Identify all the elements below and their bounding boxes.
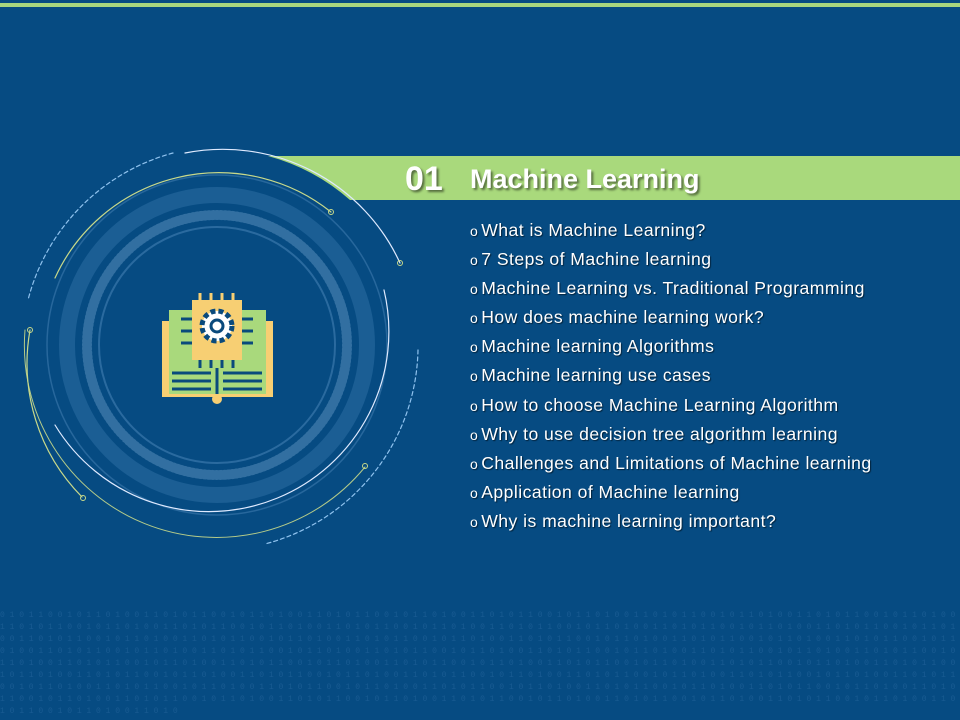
list of topics: oApplication of Machine learning [470,482,740,502]
list of topics: oMachine learning Algorithms [470,336,714,356]
circular tech graphic [24,148,419,544]
list of topics: oWhy is machine learning important? [470,511,776,531]
section number: 01 [405,160,443,198]
list of topics: oWhy to use decision tree algorithm learning [470,424,838,444]
section title: Machine Learning [470,164,700,194]
list of topics: oMachine learning use cases [470,365,711,385]
top green line [0,3,960,7]
list of topics: oHow does machine learning work? [470,307,764,327]
list of topics: oWhat is Machine Learning? [470,220,706,240]
list of topics: o7 Steps of Machine learning [470,249,712,269]
list of topics: oMachine Learning vs. Traditional Programming [470,278,865,298]
list of topics: oHow to choose Machine Learning Algorithm [470,395,839,415]
icon: book with chip [162,293,273,404]
list of topics: oChallenges and Limitations of Machine learning [470,453,872,473]
bottom binary pattern: 0 1 0 1 1 0 0 1 0 1 1 0 1 0 0 1 1 0 1 0 1 1 0 0 1 0 1 1 0 1 0 0 1 1 0 1 0 1 1 0 0 1 0 1 1 0 1 0 0 1 1 0 1 0 1 1 0 0 1 0 1 1 0 1 0 0 1 1 0 1 0 1 1 0 0 1 0 1 1 0 1 0 0 1 1 0 1 0 1 1 0 0 1 0 1 1 0 1 0 0 1 1 0 1 0 1 1 0 0 1 0 1 1 0 1 0 0 1 1 0 1 0 1 1 0 0 1 0 1 1 0 1 0 0 1 1 0 1 0 1 1 0 0 1 0 1 1 0 1 0 0 1 1 0 1 0 1 1 0 0 1 0 1 1 0 1 0 0 1 1 0 1 0 1 1 0 0 1 0 1 1 0 1 0 0 1 1 0 1 0 1 1 0 0 1 0 1 1 0 1 0 0 1 1 0 1 0 1 1 0 0 1 0 1 1 0 1 0 0 1 1 0 1 0 1 1 0 0 1 0 1 1 0 1 0 0 1 1 0 1 0 1 1 0 0 1 0 1 1 0 1 0 0 1 1 0 1 0 1 1 0 0 1 0 1 1 0 1 0 0 1 1 0 1 0 1 1 0 0 1 0 1 1 0 1 0 0 1 1 0 1 0 1 1 0 0 1 0 1 1 0 1 0 0 1 1 0 1 0 1 1 0 0 1 0 1 1 0 1 0 0 1 1 0 1 0 1 1 0 0 1 0 1 1 0 1 0 0 1 1 0 1 0 1 1 0 0 1 0 1 1 0 1 0 0 1 1 0 1 0 1 1 0 0 1 0 1 1 0 1 0 0 1 1 0 1 0 1 1 0 0 1 0 1 1 0 1 0 0 1 1 0 1 0 1 1 0 0 1 0 1 1 0 1 0 0 1 1 0 1 0 1 1 0 0 1 0 1 1 0 1 0 0 1 1 0 1 0 1 1 0 0 1 0 1 1 0 1 0 0 1 1 0 1 0 1 1 0 0 1 0 1 1 0 1 0 0 1 1 0 1 0 1 1 0 0 1 0 1 1 0 1 0 0 1 1 0 1 0 1 1 0 0 1 0 1 1 0 1 0 0 1 1 0 1 0 1 1 0 0 1 0 1 1 0 1 0 0 1 1 0 1 0 1 1 0 0 1 0 1 1 0 1 0 0 1 1 0 1 0 1 1 0 0 1 0 1 1 0 1 0 0 1 1 0 1 0 1 1 0 0 1 0 1 1 0 1 0 0 1 1 0 1 0 1 1 0 0 1 0 1 1 0 1 0 0 1 1 0 1 0 1 1 0 0 1 0 1 1 0 1 0 0 1 1 0 1 0 1 1 0 0 1 0 1 1 0 1 0 0 1 1 0 1 0 1 1 0 0 1 0 1 1 0 1 0 0 1 1 0 1 0 1 1 0 0 1 0 1 1 0 1 0 0 1 1 0 1 0 1 1 0 0 1 0 1 1 0 1 0 0 1 1 0 1 0 1 1 0 0 1 0 1 1 0 1 0 0 1 1 0 1 0 1 1 0 0 1 0 1 1 0 1 0 0 1 1 0 1 0 1 1 0 0 1 0 1 1 0 1 0 0 1 1 0 1 0 1 1 0 0 1 0 1 1 0 1 0 0 1 1 0 1 0 1 1 0 0 1 0 1 1 0 1 0 0 1 1 0 1 0 1 1 0 0 1 0 1 1 0 1 0 0 1 1 0 1 0 1 1 0 0 1 0 1 1 0 1 0 0 1 1 0 1 0 1 1 0 0 1 0 1 1 0 1 0 0 1 1 0 1 0 1 1 0 0 1 0 1 1 0 1 0 0 1 1 0 1 0 [0,611,955,716]
